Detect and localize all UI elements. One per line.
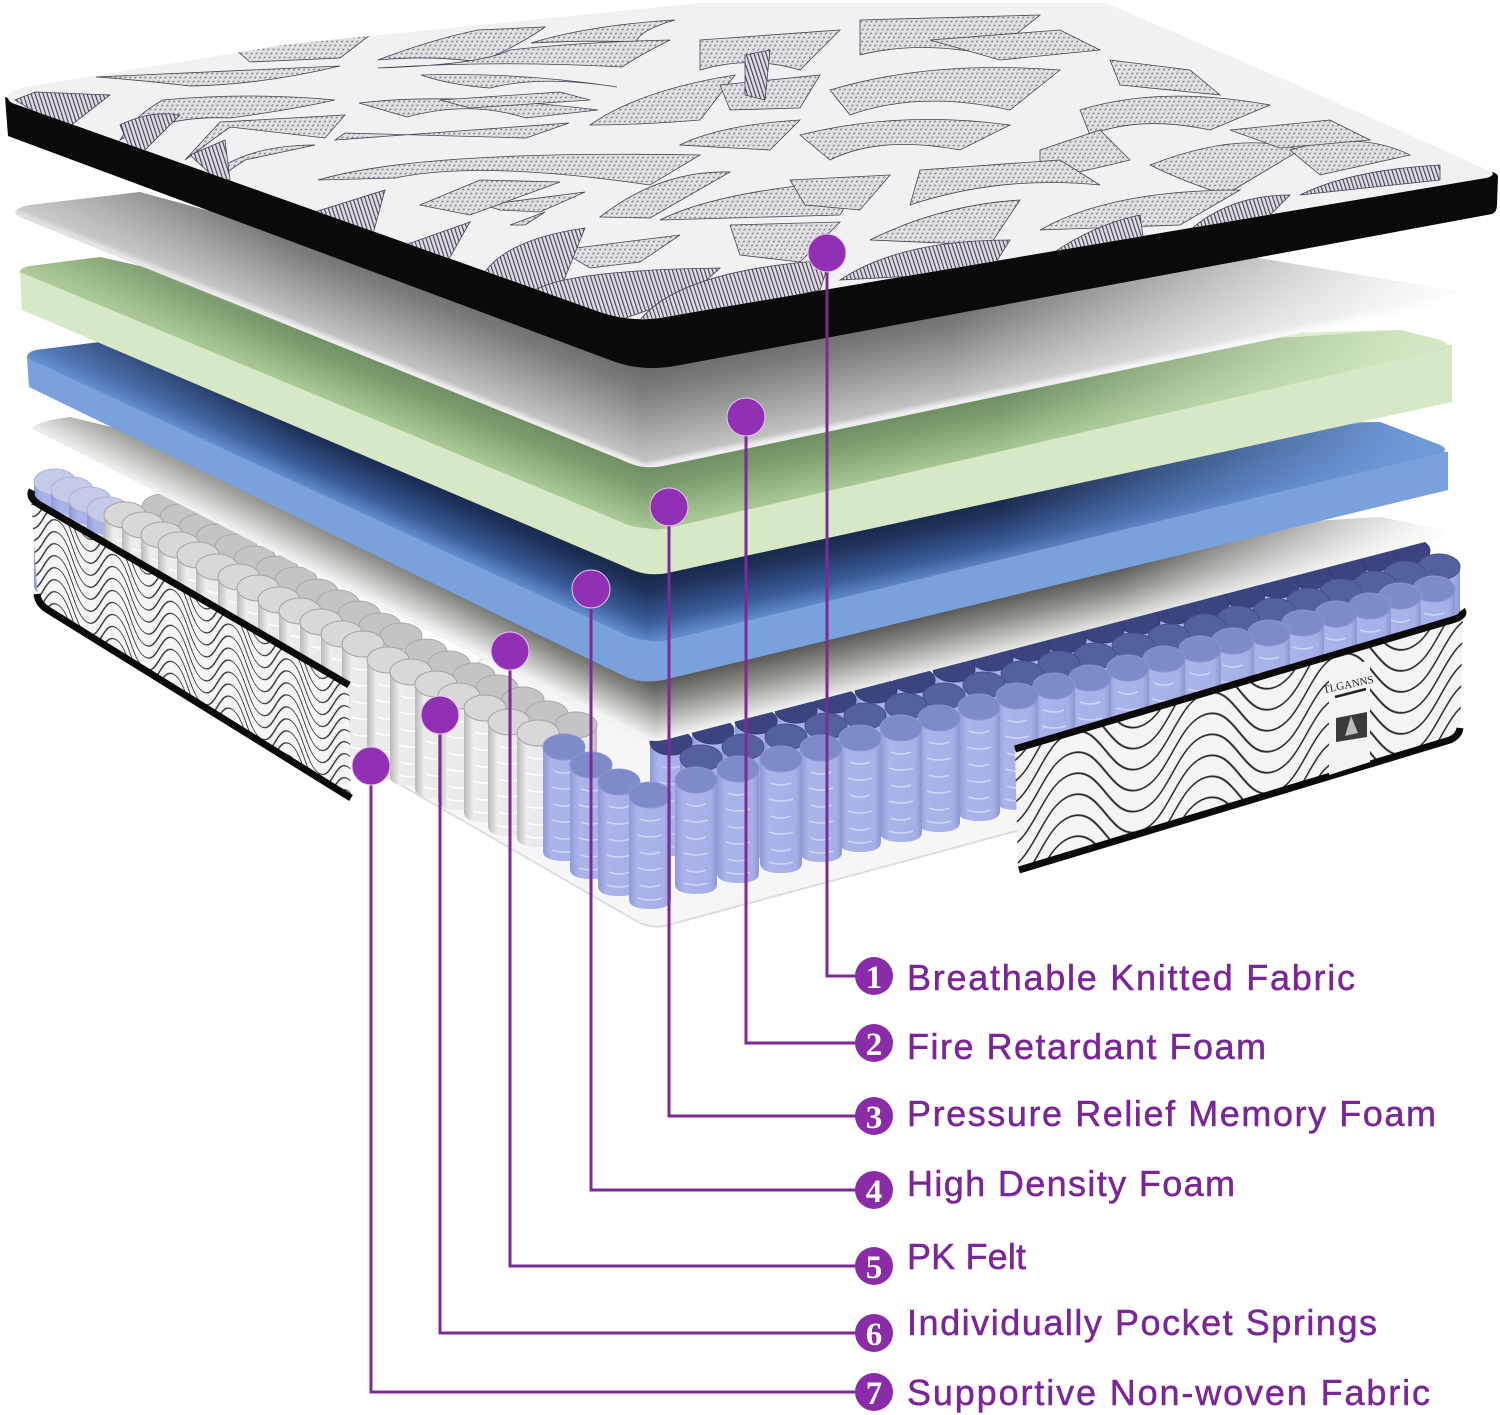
legend item 4: High Density Foam [907,1163,1235,1204]
layer: pressure relief memory foam, green [20,257,1452,574]
layer: fire retardant foam sheet [15,192,1466,467]
brand tag on side wall [1322,660,1375,775]
legend item 2: 2 [866,1027,882,1063]
legend item 6: 6 [866,1317,882,1353]
legend item 5 [855,1236,1026,1286]
springs: middle purple row [680,554,1460,872]
springs: front white row [104,502,559,847]
springs: rear white row [142,494,597,839]
leader lines [371,253,860,1392]
springs: front purple row [543,576,1455,909]
panel: spring unit base, supportive non-woven fabric [375,640,1020,927]
legend item 7: Supportive Non-woven Fabric [907,1372,1430,1413]
layer: high density foam, blue [27,342,1448,682]
legend [855,957,1436,1413]
legend item 6: Individually Pocket Springs [907,1302,1377,1343]
legend item 2: Fire Retardant Foam [907,1026,1266,1067]
legend item 3: 3 [866,1100,882,1136]
quilted top surface [8,3,1493,319]
brand tag on side wall: TLGANNS [1322,674,1375,696]
legend item 1: Breathable Knitted Fabric [907,957,1355,998]
legend item 4: 4 [866,1174,882,1210]
layer: breathable knitted fabric top panel [5,3,1498,368]
panel: left side wall with wave pattern [31,490,351,800]
legend item 7: 7 [866,1376,882,1412]
springs: far left purple group [34,469,129,624]
springs: rear purple row [650,538,1430,856]
legend item 1: 1 [866,960,882,996]
layer: PK felt sheet [32,417,1444,741]
black mattress border [5,97,1498,368]
legend item 5: 5 [866,1250,882,1286]
legend item 3: Pressure Relief Memory Foam [907,1093,1436,1134]
quilted hatched folds [15,50,1440,320]
marker dots on layers [352,234,846,785]
legend item 5: PK Felt [907,1236,1026,1277]
panel: right side wall with wave pattern [1015,610,1463,873]
quilted leaf pattern [96,15,1410,268]
panel: pocket spring block [34,469,1460,909]
